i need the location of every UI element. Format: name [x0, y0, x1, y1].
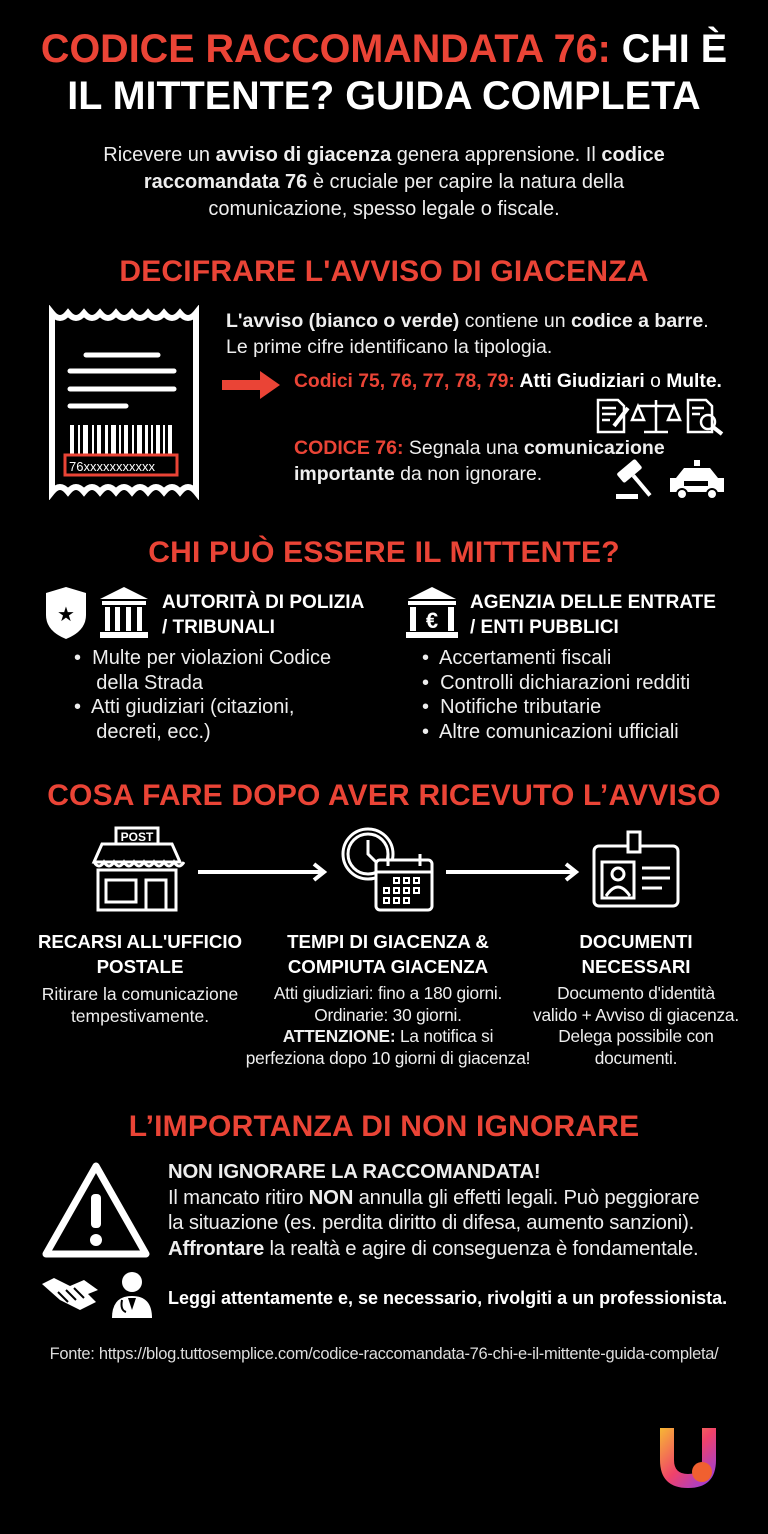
- icons: gavel car: [616, 459, 724, 499]
- icon: post office: POST: [121, 830, 154, 844]
- text: warning: [168, 1161, 699, 1260]
- intro text: raccomandata 76 è cruciale per capire la natura della: [144, 171, 624, 193]
- logo: [660, 1428, 716, 1488]
- icon: euro bank: [406, 587, 458, 638]
- step 1 text: POSTALE: [97, 956, 183, 977]
- heading: cosa fare: COSA FARE DOPO AVER RICEVUTO L’AVVISO: [47, 779, 721, 812]
- step 1 text: Ritirare la comunicazione: [42, 984, 238, 1004]
- icons: handshake professional: [42, 1272, 152, 1318]
- list: • Notifiche tributarie: [422, 696, 601, 718]
- heading: agenzia: / ENTI PUBBLICI: [470, 617, 619, 638]
- list: della Strada: [96, 672, 203, 694]
- source: Fonte: https://blog.tuttosemplice.com/codice-raccomandata-76-chi-e-il-mittente-guida-completa/: [50, 1345, 718, 1363]
- step 3 text: documenti.: [595, 1048, 677, 1068]
- step 1 text: tempestivamente.: [71, 1006, 209, 1026]
- heading: agenzia: [470, 592, 716, 638]
- step 3 text: Delega possibile con: [558, 1026, 714, 1046]
- step 2 text: Atti giudiziari: fino a 180 giorni.: [274, 983, 502, 1003]
- step 1 text: [38, 931, 242, 1026]
- step 2 text: [246, 931, 530, 1068]
- intro text: comunicazione, spesso legale o fiscale.: [208, 198, 560, 220]
- icons: documents scale: [596, 398, 724, 436]
- list: • Multe per violazioni Codice: [74, 647, 331, 669]
- heading: autorità: AUTORITÀ DI POLIZIA: [162, 592, 364, 613]
- heading: mittente: CHI PUÒ ESSERE IL MITTENTE?: [148, 536, 620, 569]
- step 2 text: Ordinarie: 30 giorni.: [314, 1004, 462, 1024]
- icon: ID card: [592, 830, 680, 908]
- title: [41, 26, 727, 118]
- text: avviso description: Le prime cifre identificano la tipologia.: [226, 336, 552, 358]
- list: • Controlli dichiarazioni redditi: [422, 672, 690, 694]
- text: codice 76: CODICE 76: Segnala una comunicazione: [294, 437, 665, 459]
- text: codice 76: importante da non ignorare.: [294, 463, 542, 485]
- intro text: [103, 144, 665, 220]
- heading: agenzia: AGENZIA DELLE ENTRATE: [470, 592, 716, 613]
- step 3 text: NECESSARI: [581, 956, 691, 977]
- step 3 text: Documento d'identità: [557, 983, 715, 1003]
- step 2 text: ATTENZIONE: La notifica si: [283, 1026, 493, 1046]
- text: avviso description: L'avviso (bianco o verde) contiene un codice a barre.: [226, 310, 709, 332]
- list: • Atti giudiziari (citazioni,: [74, 696, 294, 718]
- step 2 text: TEMPI DI GIACENZA &: [287, 931, 489, 952]
- heading: autorità: / TRIBUNALI: [162, 617, 275, 638]
- icon: badge and courthouse: [46, 587, 148, 639]
- title: CODICE RACCOMANDATA 76: CHI È: [41, 27, 727, 71]
- icon: receipt with barcode: [49, 305, 199, 500]
- arrow 1: [198, 862, 328, 882]
- icon: clock calendar: [342, 828, 434, 912]
- text: avviso description: [226, 310, 709, 358]
- text: warning: NON IGNORARE LA RACCOMANDATA!: [168, 1161, 540, 1183]
- step 2 text: perfeziona dopo 10 giorni di giacenza!: [246, 1048, 530, 1068]
- heading: autorità: [162, 590, 364, 638]
- panel: polizia: [46, 587, 364, 742]
- intro text: Ricevere un avviso di giacenza genera apprensione. Il codice: [103, 144, 665, 166]
- list: decreti, ecc.): [96, 720, 211, 742]
- text: warning: la situazione (es. perdita diritto di difesa, aumento sanzioni).: [168, 1212, 694, 1234]
- title: IL MITTENTE? GUIDA COMPLETA: [67, 74, 701, 118]
- text: codici: Codici 75, 76, 77, 78, 79: Atti Giudiziari o Multe.: [294, 371, 722, 392]
- arrow 2: [446, 862, 580, 882]
- text: warning: Affrontare la realtà e agire di conseguenza è fondamentale.: [168, 1238, 698, 1260]
- icon: badge and courthouse: ★: [57, 604, 75, 626]
- icon: euro bank: €: [426, 608, 438, 633]
- step 3 text: valido + Avviso di giacenza.: [533, 1004, 739, 1024]
- list: • Altre comunicazioni ufficiali: [422, 720, 679, 742]
- icon: post office: [92, 826, 185, 912]
- panel: agenzia entrate: [406, 587, 716, 742]
- text: warning: Il mancato ritiro NON annulla gli effetti legali. Può peggiorare: [168, 1186, 699, 1208]
- icon: warning triangle: [42, 1162, 150, 1258]
- step 2 text: COMPIUTA GIACENZA: [288, 956, 488, 977]
- step 3 text: [533, 931, 739, 1068]
- list: • Accertamenti fiscali: [422, 647, 611, 669]
- step 1 text: RECARSI ALL'UFFICIO: [38, 931, 242, 952]
- step 3 text: DOCUMENTI: [579, 931, 693, 952]
- heading: decifrare: DECIFRARE L'AVVISO DI GIACENZA: [119, 255, 649, 288]
- arrow: red: [222, 371, 280, 399]
- text: codice 76: [294, 437, 665, 485]
- heading: importanza: L’IMPORTANZA DI NON IGNORARE: [129, 1110, 639, 1143]
- text: advice: Leggi attentamente e, se necessario, rivolgiti a un professionista.: [168, 1288, 727, 1308]
- list: [422, 647, 690, 742]
- list: [74, 647, 331, 742]
- icon: receipt with barcode: 76xxxxxxxxxxx: [69, 459, 155, 474]
